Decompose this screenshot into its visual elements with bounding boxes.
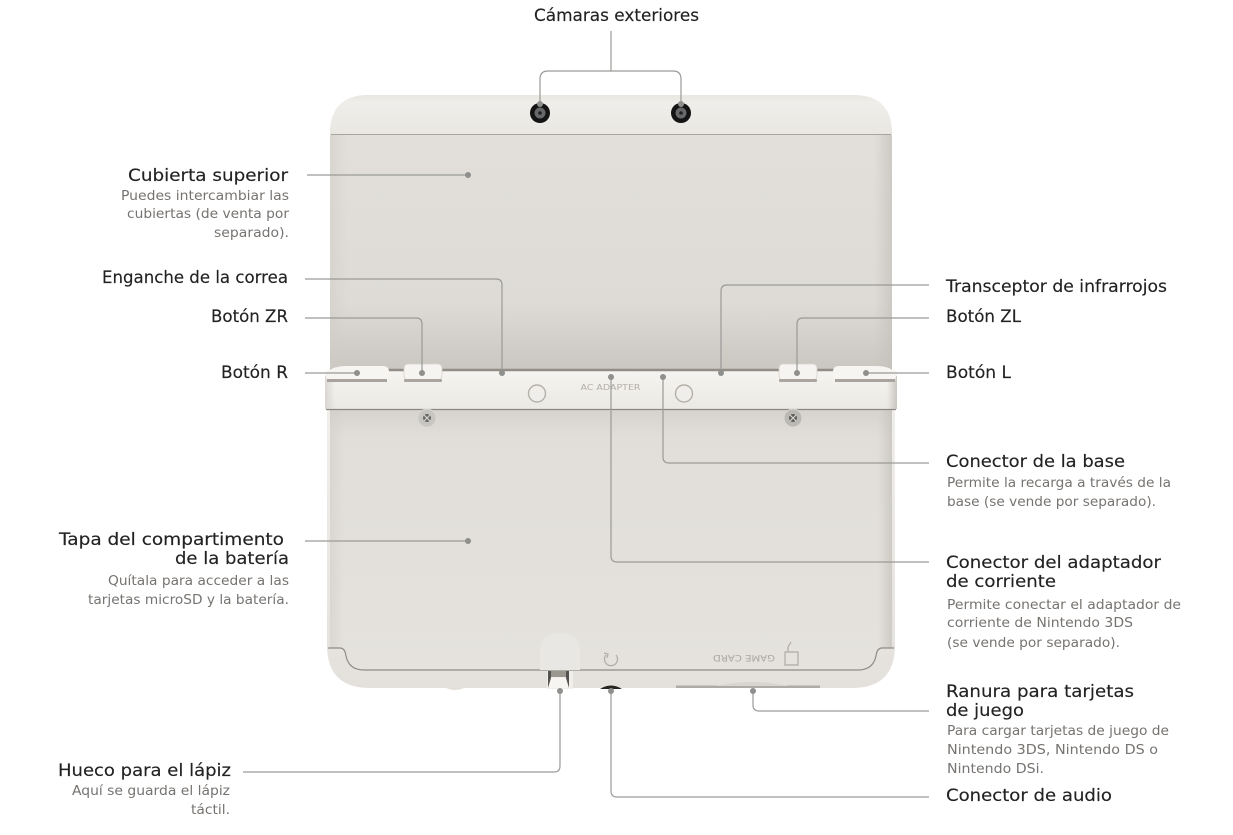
callout: hueco para el lápiz: Hueco para el lápiz bbox=[58, 761, 231, 781]
callout: conector de la base: Permite la recarga a través de la bbox=[947, 476, 1171, 491]
screw left bbox=[418, 409, 436, 427]
callout: ranura para tarjetas de juego: de juego bbox=[946, 701, 1024, 721]
callout: conector del adaptador de corriente: (se vende por separado). bbox=[947, 636, 1120, 651]
callout: conector del adaptador de corriente: Conector del adaptador bbox=[946, 553, 1161, 573]
button L bbox=[833, 366, 897, 382]
stylus recess bbox=[540, 633, 580, 689]
button ZR bbox=[404, 364, 442, 382]
callout: transceptor de infrarrojos: Transceptor de infrarrojos bbox=[945, 277, 1167, 297]
lower body bbox=[327, 405, 895, 690]
callout: enganche de la correa bbox=[102, 268, 505, 376]
callout: tapa del compartimento: tarjetas microSD y la batería. bbox=[88, 593, 289, 608]
callout: tapa del compartimento: de la batería bbox=[175, 549, 289, 569]
callout: ranura para tarjetas de juego bbox=[750, 682, 1169, 777]
upper lid bbox=[330, 95, 892, 372]
callout: enganche de la correa: Enganche de la correa bbox=[102, 268, 288, 288]
callout: botón L: Botón L bbox=[946, 363, 1012, 383]
callout: cubierta superior: separado). bbox=[214, 226, 289, 241]
icon: game card bbox=[785, 642, 798, 665]
callout: conector de la base: Conector de la base bbox=[946, 452, 1125, 472]
callout: botón ZL bbox=[794, 307, 1022, 376]
callout: botón ZR bbox=[211, 307, 425, 376]
callout: ranura para tarjetas de juego: Nintendo DSi. bbox=[947, 762, 1044, 777]
callout: ranura para tarjetas de juego: Para cargar tarjetas de juego de bbox=[947, 724, 1169, 739]
callout: hueco para el lápiz bbox=[58, 688, 563, 818]
callout: cubierta superior bbox=[121, 166, 471, 241]
callout: tapa del compartimento bbox=[58, 530, 471, 608]
label: AC adapter: AC ADAPTER bbox=[580, 383, 640, 392]
callout: hueco para el lápiz: táctil. bbox=[191, 803, 230, 818]
game card slot bbox=[676, 682, 820, 688]
icon: reset arrow bbox=[604, 653, 618, 666]
callout: conector del adaptador de corriente: Permite conectar el adaptador de bbox=[947, 598, 1181, 613]
callout: botón R bbox=[221, 363, 360, 383]
callout: cubierta superior: Puedes intercambiar las bbox=[121, 189, 289, 204]
audio connector bbox=[600, 686, 622, 689]
screw right bbox=[784, 409, 802, 427]
callout: botón ZR: Botón ZR bbox=[211, 307, 288, 327]
callout: botón ZL: Botón ZL bbox=[946, 307, 1022, 327]
hinge band bbox=[325, 370, 897, 410]
callout: cámaras exteriores bbox=[534, 6, 699, 107]
callout: transceptor de infrarrojos bbox=[718, 277, 1167, 376]
callout: conector de la base: base (se vende por separado). bbox=[947, 495, 1156, 510]
callout: conector del adaptador de corriente bbox=[608, 374, 1181, 651]
callout: conector del adaptador de corriente: corriente de Nintendo 3DS bbox=[947, 616, 1133, 631]
label: game card: GAME CARD bbox=[712, 652, 775, 662]
callout: hueco para el lápiz: Aquí se guarda el lápiz bbox=[72, 784, 230, 799]
callout: ranura para tarjetas de juego: Ranura para tarjetas bbox=[946, 682, 1134, 702]
callout: botón R: Botón R bbox=[221, 363, 288, 383]
camera right bbox=[671, 103, 691, 123]
callout: tapa del compartimento: Tapa del compartimento bbox=[58, 530, 284, 550]
callout: conector de audio: Conector de audio bbox=[946, 786, 1112, 806]
hinge buttons bbox=[528, 385, 692, 402]
callout: cubierta superior: cubiertas (de venta por bbox=[127, 207, 290, 222]
callout: tapa del compartimento: Quítala para acceder a las bbox=[108, 574, 289, 589]
camera left bbox=[530, 103, 550, 123]
device: back of the console bbox=[325, 95, 897, 690]
callout: botón L bbox=[863, 363, 1012, 383]
callout: cámaras exteriores: Cámaras exteriores bbox=[534, 6, 699, 26]
callout: conector del adaptador de corriente: de corriente bbox=[946, 572, 1056, 592]
callout: ranura para tarjetas de juego: Nintendo 3DS, Nintendo DS o bbox=[947, 743, 1158, 758]
callout: conector de la base bbox=[660, 374, 1171, 510]
button R bbox=[325, 366, 389, 382]
callout: conector de audio bbox=[608, 688, 1112, 806]
callout: cubierta superior: Cubierta superior bbox=[128, 166, 288, 186]
button ZL bbox=[779, 364, 817, 382]
